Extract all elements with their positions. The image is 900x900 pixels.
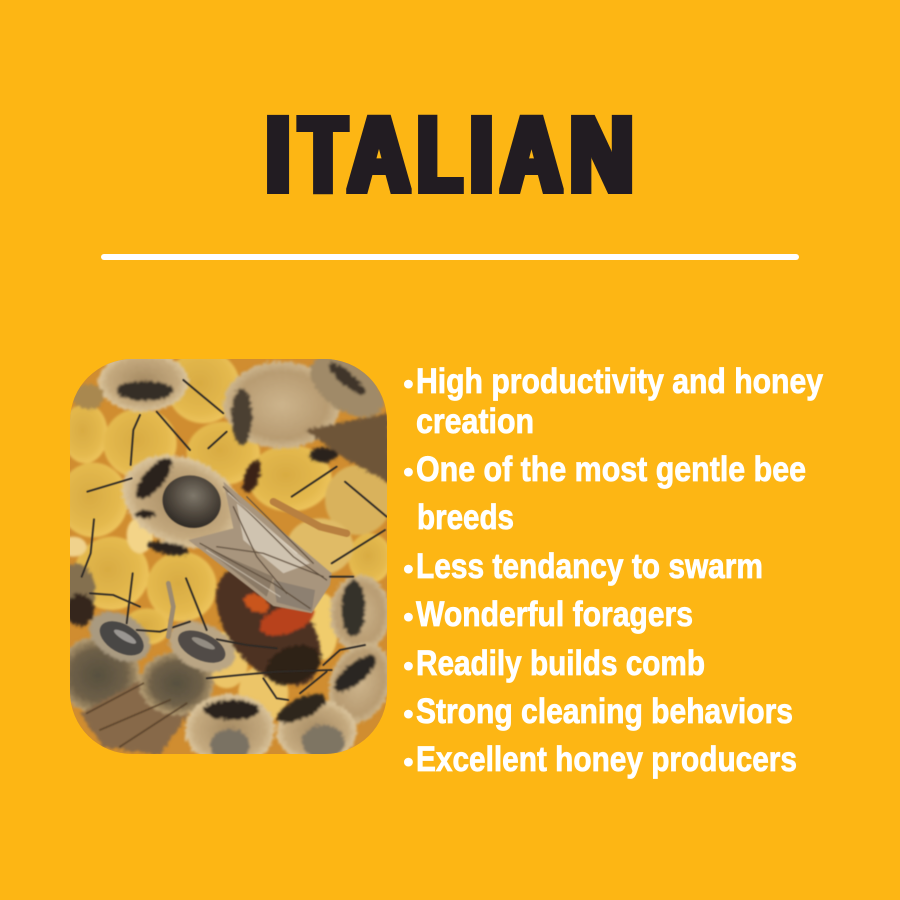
bottom-centre worker	[185, 694, 275, 766]
bullet: comb: Readily builds comb	[416, 644, 705, 683]
bullet: gentle breed: One of the most gentle bee	[416, 450, 806, 489]
bullet: honey producers: •	[403, 744, 414, 779]
right-side bees	[330, 575, 390, 652]
bullet: gentle breed: •	[403, 454, 414, 489]
bullet: swarm: Less tendancy to swarm	[416, 547, 763, 586]
bullet list	[403, 362, 823, 779]
top-right bee	[223, 362, 340, 448]
queen thorax	[120, 452, 238, 550]
title: I	[266, 94, 291, 214]
title: L	[418, 94, 462, 214]
queen abdomen	[214, 570, 324, 688]
wing streaks on lower bee	[87, 683, 187, 747]
title: I	[470, 94, 493, 214]
bullet: honey producers: Excellent honey producers	[416, 740, 797, 779]
bullet: high productivity: •	[403, 366, 414, 401]
bottom wing bee	[80, 680, 193, 755]
bullet: swarm: •	[403, 551, 414, 586]
bullet: gentle breed: breeds	[417, 498, 514, 537]
bullet: foragers: •	[403, 599, 414, 634]
bullet: high productivity	[403, 362, 823, 441]
divider line	[101, 254, 799, 260]
bullet: cleaning: •	[403, 696, 414, 731]
bullet: high productivity: High productivity and honey	[416, 362, 823, 401]
photo: queen bee with workers on honeycomb	[70, 359, 387, 754]
bullet: comb: •	[403, 648, 414, 683]
bullet: gentle breed	[403, 450, 806, 537]
queen wing veins, legs and antennae	[82, 380, 387, 747]
bullet: foragers: Wonderful foragers	[416, 595, 693, 634]
title: A	[348, 94, 410, 214]
shiny thoraxes and wings	[94, 469, 332, 669]
bees, furry texture	[70, 359, 387, 754]
title: T	[300, 94, 346, 214]
bullet: cleaning: Strong cleaning behaviors	[416, 692, 793, 731]
bottom-left worker	[70, 634, 142, 712]
title: N	[570, 94, 634, 214]
top-left bee	[98, 352, 188, 412]
bottom-right worker	[277, 700, 357, 763]
left edge bee	[70, 562, 98, 606]
title: A	[502, 94, 562, 214]
bullet: high productivity: creation	[416, 402, 534, 441]
centre worker head	[166, 620, 237, 674]
